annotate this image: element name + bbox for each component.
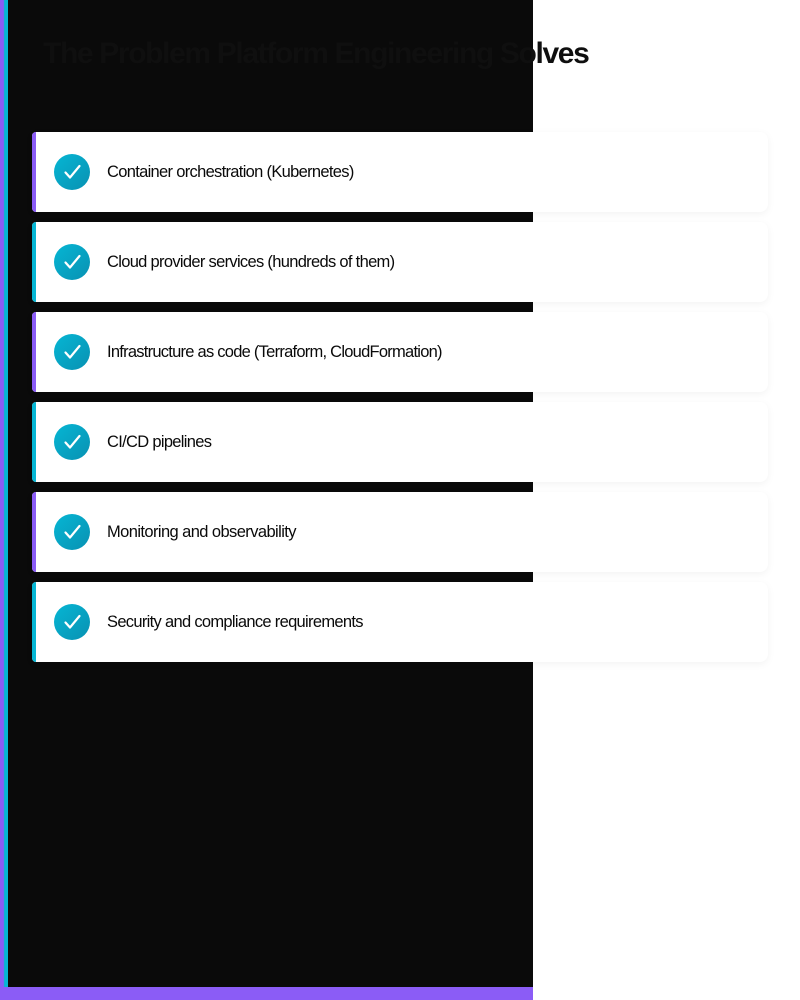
- item: infrastructure as code: [32, 312, 768, 392]
- item: cloud provider services: Cloud provider services (hundreds of them): [107, 253, 394, 271]
- item: monitoring and observability: Monitoring and observability: [107, 523, 296, 541]
- bottom purple band: [0, 987, 533, 1000]
- item: cloud provider services: [32, 222, 768, 302]
- item: CI/CD pipelines: [32, 402, 768, 482]
- item: security and compliance: [32, 582, 768, 662]
- item: infrastructure as code: Infrastructure as code (Terraform, CloudFormation): [107, 343, 442, 361]
- dark background panel: [0, 0, 533, 1000]
- item: CI/CD pipelines: CI/CD pipelines: [107, 433, 211, 451]
- item: container orchestration: Container orchestration (Kubernetes): [107, 163, 354, 181]
- left accent stripe: [0, 0, 8, 987]
- title: The Problem Platform Engineering Solves: [43, 37, 588, 70]
- item: security and compliance: Security and compliance requirements: [107, 613, 363, 631]
- item: container orchestration: [32, 132, 768, 212]
- item: monitoring and observability: [32, 492, 768, 572]
